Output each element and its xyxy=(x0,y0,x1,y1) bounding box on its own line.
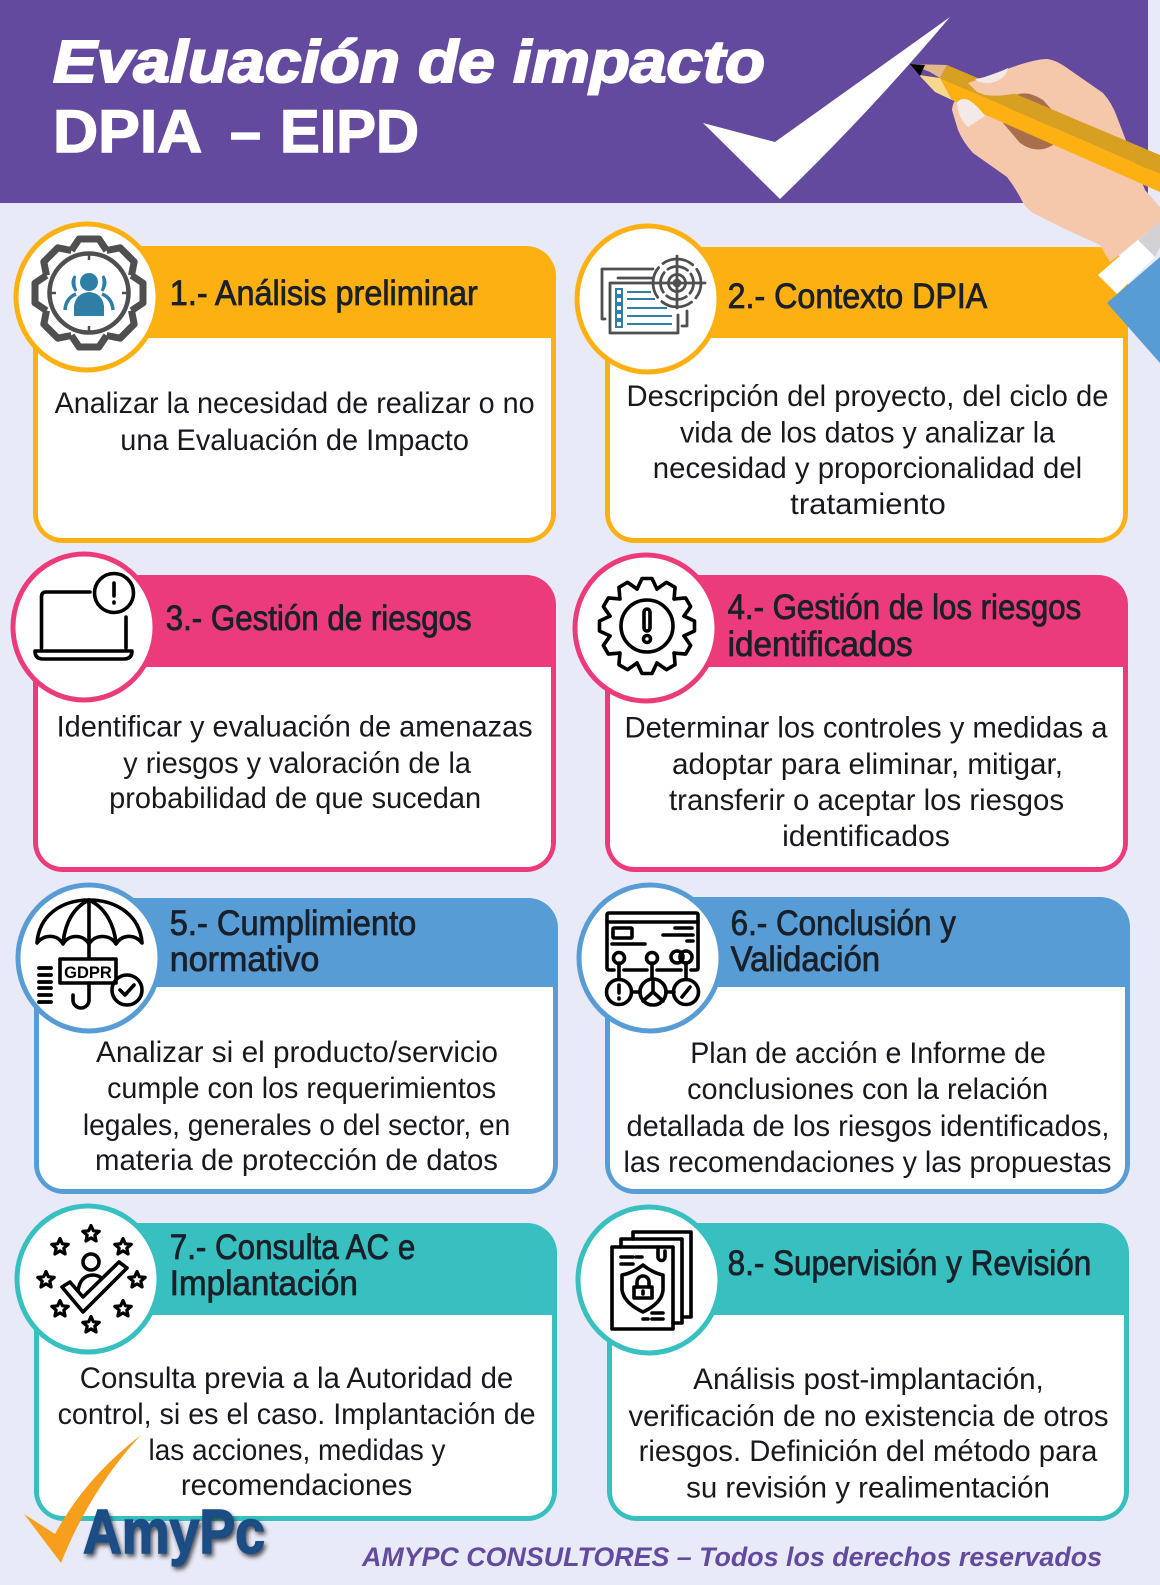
card 2 xyxy=(577,226,1128,543)
card 4 text xyxy=(624,712,1108,853)
logo: AmyPc xyxy=(24,1435,265,1567)
card 4 text: transferir o aceptar los riesgos xyxy=(669,784,1064,817)
card 3 frame xyxy=(33,575,556,872)
card 7 text: recomendaciones xyxy=(181,1469,412,1502)
card 5 xyxy=(18,885,558,1194)
card 3 text: y riesgos y valoración de la xyxy=(123,747,471,780)
card 2 body xyxy=(610,338,1123,538)
card 3 body xyxy=(38,667,551,867)
card 4 heading: identificados xyxy=(728,625,913,664)
card 7 text: Consulta previa a la Autoridad de xyxy=(80,1362,513,1395)
card 5 heading: normativo xyxy=(170,940,319,979)
card 7 heading: Implantación xyxy=(170,1264,358,1303)
card 7 text: control, si es el caso. Implantación de xyxy=(58,1398,536,1431)
card 5 text xyxy=(83,1036,510,1177)
icon: gear with alert xyxy=(600,578,694,674)
card 6 heading xyxy=(731,904,956,979)
icon: secure documents xyxy=(612,1232,691,1329)
card 8 text: Análisis post-implantación, xyxy=(693,1363,1044,1396)
card 5 badge xyxy=(18,885,160,1031)
card 6 text: detallada de los riesgos identificados, xyxy=(626,1110,1110,1143)
card 3 heading: 3.- Gestión de riesgos xyxy=(166,599,472,638)
card 5 frame xyxy=(34,898,558,1194)
card 5 text: Analizar si el producto/servicio xyxy=(96,1036,498,1069)
icon: stars and check xyxy=(38,1226,145,1332)
card 4 text: Determinar los controles y medidas a xyxy=(624,712,1108,745)
card 7 heading xyxy=(170,1228,415,1303)
card 3 xyxy=(13,554,556,872)
card 4 text: adoptar para eliminar, mitigar, xyxy=(672,748,1063,781)
logo wordmark: AmyPc xyxy=(83,1498,265,1567)
card 4 badge xyxy=(575,555,717,701)
card 6 text: Plan de acción e Informe de xyxy=(690,1037,1046,1070)
card 7 body xyxy=(39,1315,552,1516)
card 3 text xyxy=(57,710,533,815)
card 6 frame xyxy=(605,897,1130,1194)
card 8 heading: 8.- Supervisión y Revisión xyxy=(728,1244,1091,1283)
card 8 text xyxy=(628,1363,1108,1504)
card 3 badge xyxy=(13,554,155,700)
card 7 text: las acciones, medidas y xyxy=(148,1434,446,1467)
icon: laptop with alert xyxy=(35,574,134,659)
card 4 xyxy=(575,555,1128,872)
illustration: hand with pencil xyxy=(910,59,1160,363)
pencil xyxy=(940,65,1160,174)
icon: document list and target xyxy=(602,256,705,333)
card 7 badge xyxy=(17,1206,159,1352)
logo check xyxy=(24,1435,141,1563)
card 5 text: materia de protección de datos xyxy=(95,1144,498,1177)
card 8 text: riesgos. Definición del método para xyxy=(639,1435,1098,1468)
card 6 xyxy=(579,885,1130,1194)
card 8 badge xyxy=(578,1207,720,1353)
card 4 heading: 4.- Gestión de los riesgos xyxy=(728,588,1081,627)
card 6 text xyxy=(624,1037,1112,1179)
card 8 text: su revisión y realimentación xyxy=(686,1472,1050,1504)
icon: large white check mark xyxy=(703,17,950,199)
card 6 badge xyxy=(579,885,721,1031)
card 1 badge xyxy=(16,224,158,370)
card 6 body xyxy=(610,987,1125,1189)
card 5 body xyxy=(39,987,553,1189)
icon: gear with people xyxy=(35,239,143,347)
title: EIPD xyxy=(280,98,419,165)
thumb nail xyxy=(957,99,985,127)
card 6 text: las recomendaciones y las propuestas xyxy=(624,1146,1112,1179)
card 7 frame xyxy=(34,1223,557,1521)
card 1 text xyxy=(55,387,535,457)
card 4 body xyxy=(610,667,1123,867)
card 2 heading: 2.- Contexto DPIA xyxy=(728,277,988,316)
jacket sleeve xyxy=(1107,257,1160,363)
card 8 text: verificación de no existencia de otros xyxy=(628,1400,1108,1433)
shirt cuff xyxy=(1138,222,1160,257)
card 2 text: Descripción del proyecto, del ciclo de xyxy=(626,380,1108,413)
footer copyright: AMYPC CONSULTORES – Todos los derechos reservados xyxy=(361,1542,1102,1572)
icon: GDPR umbrella xyxy=(37,900,142,1008)
card 4 text: identificados xyxy=(782,820,950,853)
card 5 heading xyxy=(170,904,416,979)
card 8 frame xyxy=(607,1223,1129,1521)
card 7 xyxy=(17,1206,557,1521)
title: – xyxy=(230,98,261,165)
card 6 heading: Validación xyxy=(731,940,880,979)
card 5 heading: 5.- Cumplimiento xyxy=(170,904,416,943)
card 6 heading: 6.- Conclusión y xyxy=(731,904,956,943)
title: Evaluación de impacto xyxy=(53,29,765,95)
card 2 text xyxy=(626,380,1108,521)
finger nail xyxy=(975,68,1008,83)
card 8 xyxy=(578,1207,1129,1521)
card 5 text: legales, generales o del sector, en xyxy=(83,1109,510,1142)
card 5 text: cumple con los requerimientos xyxy=(107,1072,496,1105)
card 6 text: conclusiones con la relación xyxy=(687,1073,1048,1106)
card 4 frame xyxy=(605,575,1128,872)
card 1 body xyxy=(38,338,551,538)
card 1 text: Analizar la necesidad de realizar o no xyxy=(55,387,535,420)
card 2 text: necesidad y proporcionalidad del xyxy=(653,452,1082,485)
card 1 frame xyxy=(33,246,556,543)
finger over pencil xyxy=(968,68,1033,96)
card 3 text: probabilidad de que sucedan xyxy=(109,782,481,815)
card 1 text: una Evaluación de Impacto xyxy=(120,424,469,457)
card 2 text: tratamiento xyxy=(790,488,946,521)
card 1 heading: 1.- Análisis preliminar xyxy=(170,274,478,313)
card 3 text: Identificar y evaluación de amenazas xyxy=(57,710,533,744)
card 2 badge xyxy=(577,226,719,372)
card 1 xyxy=(16,224,556,543)
card 8 body xyxy=(612,1315,1124,1516)
title: DPIA xyxy=(53,98,201,165)
palm shadow xyxy=(1003,93,1053,150)
icon: GDPR umbrella: GDPR xyxy=(64,964,112,982)
icon: card with indicators xyxy=(606,913,698,1005)
card 4 heading xyxy=(728,588,1081,664)
title xyxy=(53,29,765,165)
card 7 heading: 7.- Consulta AC e xyxy=(170,1228,415,1267)
header band xyxy=(0,0,1148,203)
card 2 text: vida de los datos y analizar la xyxy=(680,416,1056,450)
card 2 frame xyxy=(605,247,1128,543)
card 7 text xyxy=(58,1362,536,1502)
hand xyxy=(952,59,1160,262)
